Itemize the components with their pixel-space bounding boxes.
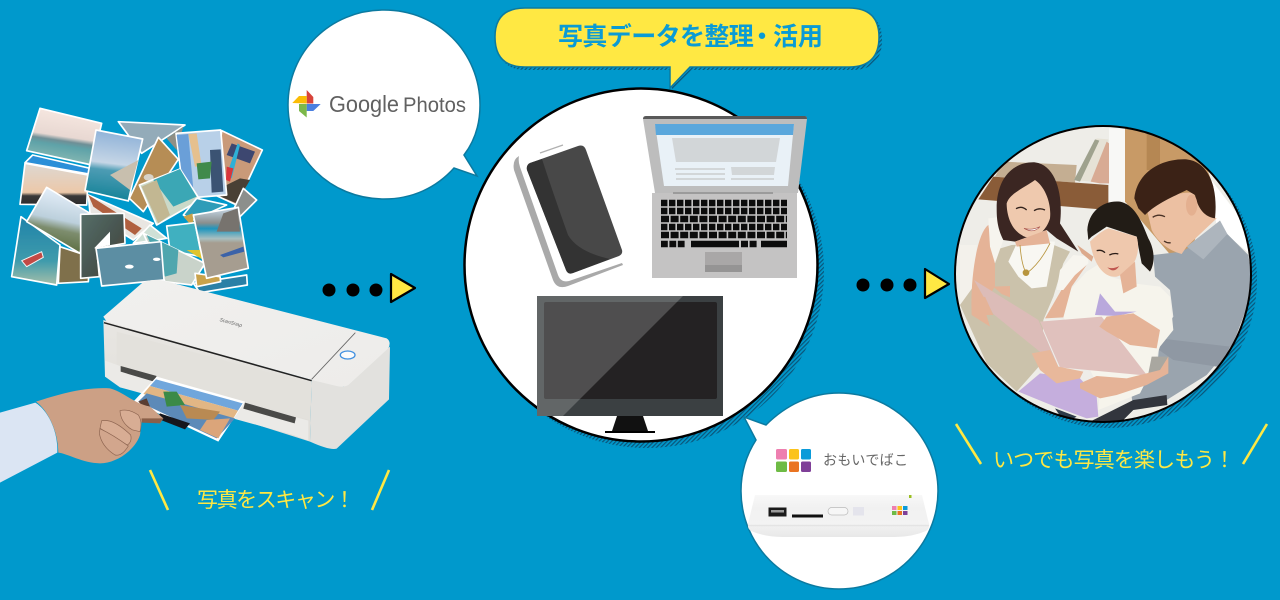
- scan button: [340, 351, 355, 359]
- girl: [1132, 318, 1174, 397]
- main circle: [464, 88, 818, 442]
- icon: monitor: [537, 296, 723, 433]
- logo text: おもいでばこ: [823, 452, 908, 468]
- icon: smartphone: [514, 145, 623, 287]
- caption: enjoy: いつでも写真を楽しもう！: [993, 449, 1235, 472]
- bubble: Google Photos: [288, 10, 480, 199]
- man head: [1147, 193, 1217, 254]
- yellow heading bubble: [495, 8, 882, 91]
- caption: scan: [150, 470, 389, 512]
- hands: [993, 286, 1010, 297]
- icon: laptop: [643, 116, 807, 278]
- yellow heading bubble: 写真データを整理: [558, 22, 754, 51]
- photo pile: [12, 108, 262, 293]
- arrow: scanner to devices: [322, 274, 415, 302]
- family circle shadow: [961, 132, 1257, 428]
- pillar and wood wall: [1109, 128, 1125, 202]
- caption: enjoy: [956, 424, 1267, 472]
- logo squares: [776, 449, 811, 472]
- main circle shadow: [470, 94, 824, 448]
- scanner logo: ScanSnap: [219, 317, 243, 329]
- inserted photo: [133, 377, 245, 442]
- icon: Google Photos pinwheel: [292, 90, 321, 118]
- sleeve: [0, 403, 57, 483]
- arrow: devices to family: [856, 269, 949, 298]
- scanner with photo and hand: [0, 280, 390, 483]
- device: [748, 495, 929, 537]
- keyboard: [661, 203, 787, 244]
- scanner body: [103, 280, 390, 449]
- window and sofa: [1211, 180, 1248, 252]
- album: [974, 280, 1058, 367]
- shelf and books: [995, 162, 1077, 183]
- man shirt: [1132, 221, 1253, 409]
- yellow heading bubble: 活用: [773, 23, 823, 51]
- caption: scan: 写真をスキャン！: [197, 489, 355, 512]
- hand: [36, 388, 163, 463]
- Google Photos wordmark: Google: [329, 91, 399, 117]
- yellow heading bubble: ・: [750, 23, 775, 51]
- family photo: [953, 123, 1260, 430]
- bubble: Omoide-bako: [741, 393, 938, 589]
- Google Photos wordmark: Photos: [403, 94, 466, 117]
- woman: [960, 243, 1070, 392]
